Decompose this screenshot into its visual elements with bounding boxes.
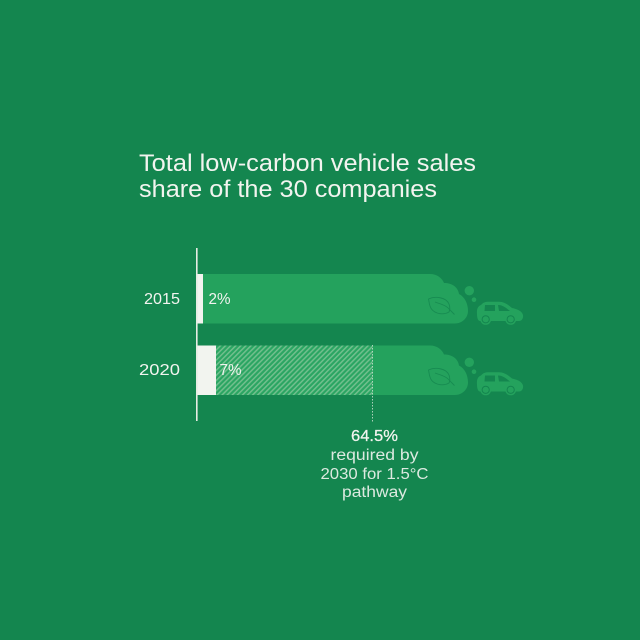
2015 value bar bbox=[197, 274, 203, 324]
callout: 64.5% required: pathway bbox=[342, 484, 407, 501]
bar: 2015 bbox=[197, 274, 523, 325]
year label 2015: 2015 bbox=[144, 291, 180, 308]
bar track with emission cloud bbox=[197, 274, 468, 324]
emission puffs bbox=[465, 286, 476, 302]
icon: car bbox=[477, 372, 523, 395]
bar: 2020 bbox=[197, 346, 523, 395]
value label 2%: 2% bbox=[208, 291, 231, 308]
emission puffs bbox=[465, 358, 476, 374]
callout: 64.5% required: required by bbox=[330, 447, 419, 464]
callout: 64.5% required: 2030 for 1.5°C bbox=[320, 466, 428, 483]
title bbox=[139, 150, 476, 203]
icon: leaf bbox=[428, 297, 454, 314]
bar track with emission cloud bbox=[197, 346, 468, 395]
2020 value bar bbox=[197, 346, 216, 395]
title: Total low-carbon vehicle sales bbox=[139, 150, 476, 177]
icon: car bbox=[477, 302, 523, 325]
axis line bbox=[196, 248, 198, 421]
title: share of the 30 companies bbox=[139, 176, 437, 203]
icon: leaf bbox=[428, 368, 454, 386]
callout: 64.5% required: 64.5% bbox=[351, 428, 398, 445]
year label 2020: 2020 bbox=[139, 362, 180, 379]
value label 7%: 7% bbox=[220, 362, 242, 379]
callout: 64.5% required bbox=[320, 428, 428, 501]
dotted marker at 64.5% bbox=[372, 345, 374, 423]
hatched gap to 64.5% bbox=[216, 346, 372, 395]
